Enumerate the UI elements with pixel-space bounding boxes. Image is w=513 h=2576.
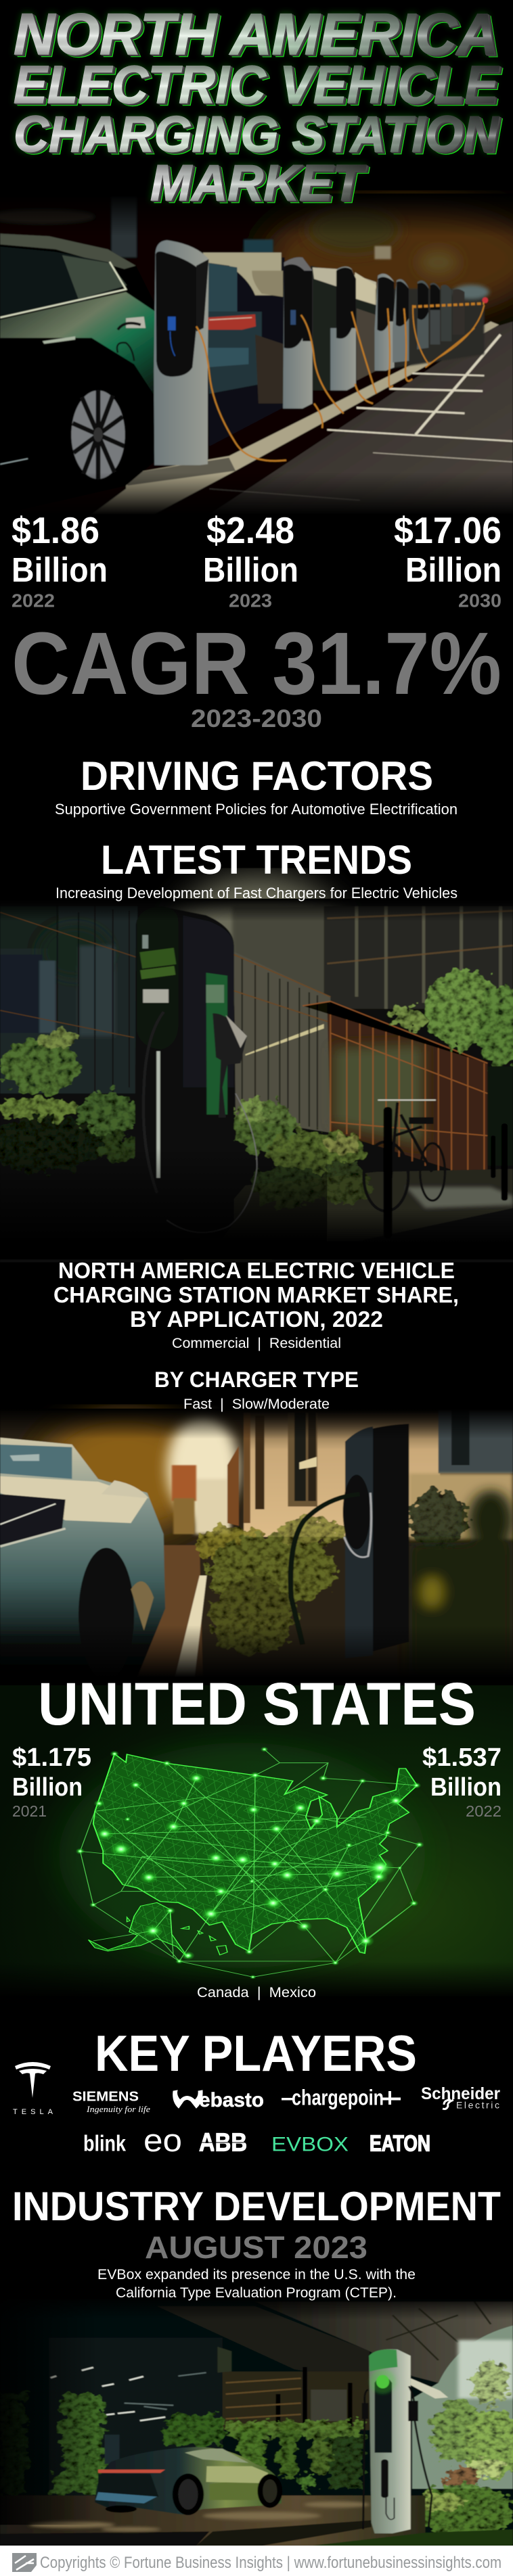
- floor: dappled pavement: [0, 2496, 513, 2546]
- logo: EO: eo: [143, 2122, 182, 2158]
- CAGR period: 2023-2030: [191, 705, 322, 732]
- stat: United States 2022: 2022: [466, 1802, 501, 1820]
- car: silver-blue vehicle front: [0, 1438, 165, 1681]
- plants: garden bed: [196, 1490, 468, 1656]
- bollards: [384, 1107, 508, 1238]
- text: industry development: California Type Evaluation Program (CTEP).: [116, 2285, 397, 2301]
- heading: driving factors: DRIVING FACTORS: [81, 753, 433, 799]
- stat: 2023 market size: Billion: [203, 551, 298, 589]
- stat: 2022 market size: Billion: [12, 551, 108, 589]
- charger: home charging post: [290, 1424, 409, 1658]
- title: CHARGING STATION: [14, 106, 499, 162]
- stat: 2023 market size: 2023: [229, 590, 272, 611]
- text: industry development: EVBox expanded its presence in the U.S. with the: [97, 2266, 416, 2282]
- chargers: receding row of charging posts: [154, 240, 464, 465]
- logo: Siemens: Ingenuity for life: [86, 2104, 150, 2114]
- title: ELECTRIC VEHICLE: [14, 54, 499, 114]
- stat: United States 2022: [422, 1743, 501, 1820]
- heading: market share by application: BY APPLICATION, 2022: [130, 1307, 383, 1332]
- logo: EVBox: EVBOX: [271, 2134, 349, 2156]
- logo: ChargePoint: chargepoin: [292, 2086, 384, 2110]
- stat: United States 2021: $1.175: [12, 1743, 91, 1772]
- bicycle: [364, 1100, 445, 1211]
- text: other countries: Canada | Mexico: [197, 1985, 316, 2000]
- logo: Webasto: ebasto: [199, 2089, 264, 2111]
- stat: 2022 market size: [12, 509, 108, 611]
- subheading: date: AUGUST 2023: [145, 2230, 367, 2265]
- text: latest trend: Increasing Development of Fast Chargers for Electric Vehicles: [55, 885, 458, 901]
- heading: latest trends: LATEST TRENDS: [101, 837, 412, 883]
- stat: United States 2021: 2021: [12, 1802, 47, 1820]
- map: connected United States network: [59, 1743, 425, 1980]
- heading: market share by application: [53, 1258, 459, 1332]
- photo: sports car at green charging station: [0, 2295, 513, 2546]
- heading: market share by application: NORTH AMERICA ELECTRIC VEHICLE: [58, 1258, 455, 1283]
- plants: hedges and hanging greenery: [0, 2392, 363, 2496]
- photo: car at home charger: [0, 1409, 513, 1685]
- text: driving factor: Supportive Government Policies for Automotive Electrification: [55, 801, 458, 818]
- text: charger type segments: Fast | Slow/Moderate: [183, 1397, 330, 1412]
- cables: orange charging cables: [196, 304, 484, 461]
- title: [14, 2, 499, 211]
- stat: 2022 market size: $1.86: [12, 509, 99, 551]
- stat: 2030 market size: $17.06: [394, 509, 501, 551]
- stat: 2023 market size: $2.48: [206, 509, 294, 551]
- stat: 2023 market size: [203, 509, 298, 611]
- logo: Schneider Electric: Schneider: [421, 2084, 500, 2103]
- stat: United States 2021: Billion: [12, 1773, 83, 1802]
- stat: 2030 market size: 2030: [458, 590, 501, 611]
- car: foreground vehicle: [0, 233, 157, 515]
- car: green electric sports car: [95, 2447, 282, 2515]
- photo: row of EV charging stations: [0, 193, 513, 517]
- stat: 2030 market size: Billion: [405, 551, 501, 589]
- heading: key players: KEY PLAYERS: [95, 2025, 417, 2082]
- plants: left foliage: [0, 1029, 137, 1172]
- logo: ABB: ABB: [199, 2129, 247, 2157]
- plants: sunlit greenery right: [416, 2360, 513, 2538]
- logo: Schneider Electric: Electric: [456, 2099, 499, 2110]
- charger: dark charging column: [135, 906, 257, 1238]
- title: MARKET: [150, 154, 367, 211]
- text: industry development: [97, 2266, 416, 2301]
- logo: Fortune Business Insights: [12, 2553, 37, 2572]
- logo: Siemens: [72, 2090, 150, 2114]
- text: application segments: Commercial | Residential: [172, 1336, 341, 1351]
- logo: Tesla: [13, 2062, 53, 2116]
- photo: charger beside fence and bicycle: [0, 876, 513, 1263]
- heading: by charger type: BY CHARGER TYPE: [154, 1367, 359, 1392]
- stat: 2022 market size: 2022: [12, 590, 55, 611]
- heading: United States: UNITED STATES: [38, 1670, 476, 1737]
- footer band: [0, 2546, 513, 2576]
- plants: central foliage: [232, 1100, 373, 1208]
- logo: Eaton: EATON: [370, 2131, 430, 2156]
- charger: green charging post: [362, 2349, 432, 2533]
- logo: Tesla: TESLA: [13, 2108, 53, 2116]
- stat: United States 2021: [12, 1743, 91, 1820]
- logo: Siemens: SIEMENS: [72, 2090, 139, 2105]
- heading: market share by application: CHARGING STATION MARKET SHARE,: [53, 1282, 459, 1307]
- logo: Blink: blink: [83, 2131, 127, 2156]
- panel: United States map background: [0, 1685, 513, 1996]
- title: NORTH AMERICA: [14, 2, 498, 67]
- stat: 2030 market size: [394, 509, 501, 611]
- stat: United States 2022: Billion: [430, 1773, 501, 1802]
- stat: United States 2022: $1.537: [422, 1743, 501, 1772]
